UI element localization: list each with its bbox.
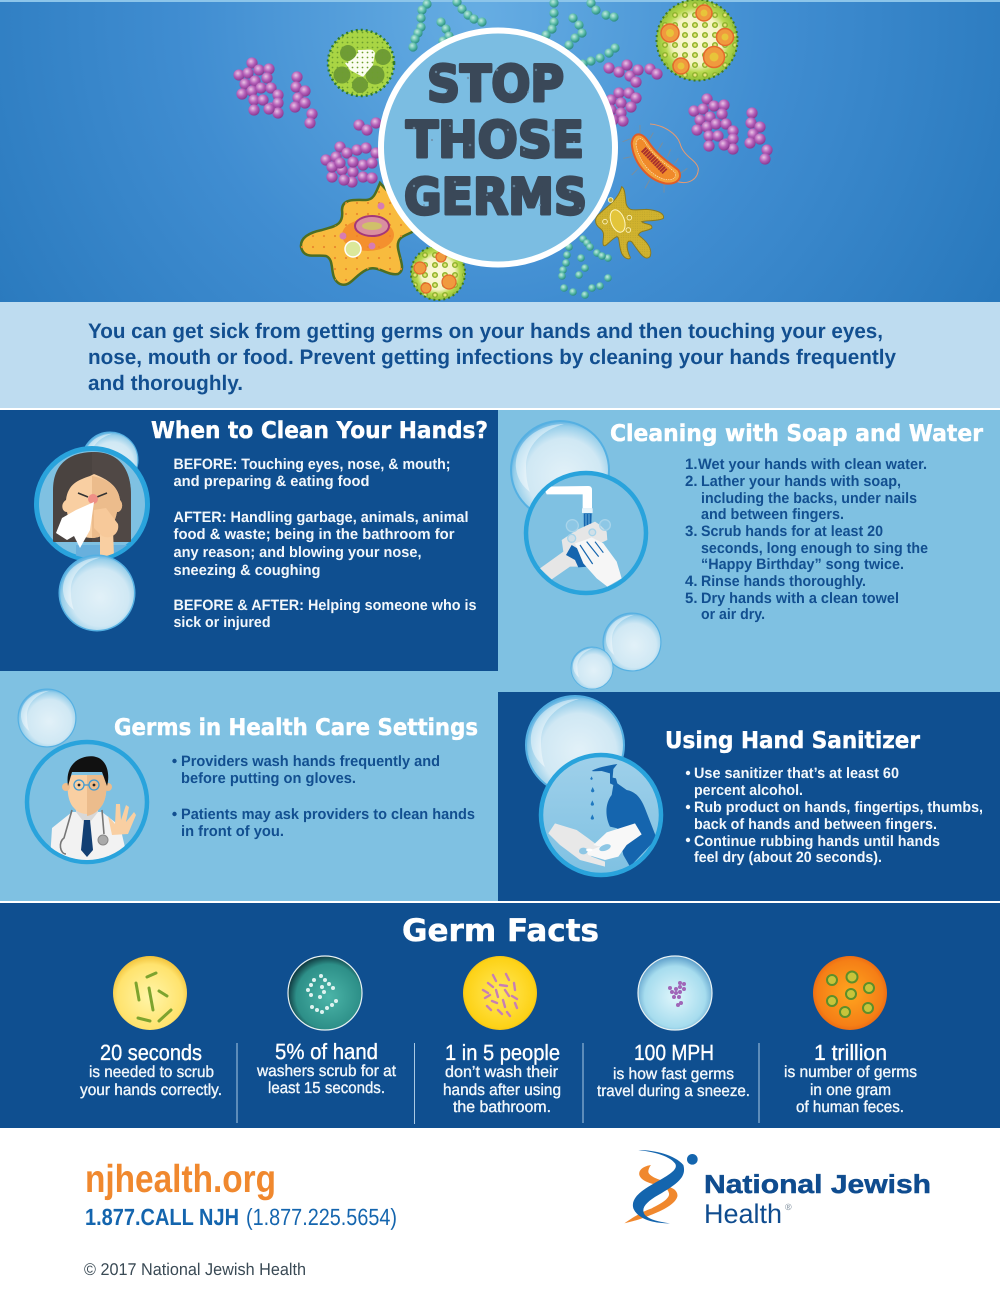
text: when to clean: sick or injured [174,614,270,631]
fact: 5% of hand [256,956,397,1097]
logo: National Jewish Health [624,1150,931,1229]
text: soap steps: 5. [685,590,698,607]
fact: 100 MPH: is how fast germs [613,1066,734,1083]
icon: bubble [18,689,76,747]
germ: orange bacterium [623,124,698,193]
text: when to clean: BEFORE & AFTER: Helping someone who is [174,597,476,614]
text: soap steps [685,456,928,623]
fact: 20 seconds: 20 seconds [100,1040,202,1065]
title: THOSE [406,111,584,169]
intro text: You can get sick from getting germs on your hands and then touching your eyes, [88,320,883,343]
text: provider bullets: Patients may ask providers to clean hands [181,806,475,823]
icon: washing hands [526,473,646,593]
heading: Using Hand Sanitizer [665,728,921,754]
intro text [88,320,896,395]
footer contact [84,1158,397,1279]
fact: 20 seconds: your hands correctly. [80,1082,222,1099]
text: sanitizer bullets [686,765,983,866]
text: when to clean: food & waste; being in the bathroom for [174,526,455,543]
panel: using hand sanitizer [498,692,1000,901]
intro text: and thoroughly. [88,372,243,395]
logo text [704,1169,931,1229]
text: sanitizer bullets: Use sanitizer that’s at least 60 [694,765,899,782]
text: soap steps: or air dry. [701,606,765,623]
text: sanitizer bullets: back of hands and between fingers. [694,816,937,833]
intro band [0,302,1000,408]
panel: germs in health care settings [0,671,498,901]
fact: 1 in 5 people [443,956,561,1116]
germ: teal bead chains top [408,0,620,69]
heading: Germs in Health Care Settings [114,715,478,741]
text: provider bullets: before putting on gloves. [181,770,356,787]
text: when to clean: any reason; and blowing your nose, [174,544,422,561]
text: soap steps: 1. [685,456,698,473]
germ: green virus upper right [656,0,738,80]
text: soap steps: 4. [685,573,698,590]
fact: 1 in 5 people: 1 in 5 people [445,1040,560,1065]
fact: 20 seconds [80,956,222,1099]
icon: bubble [526,696,624,794]
text: provider bullets [172,753,475,840]
germ: green virus bottom [411,246,465,300]
text: soap steps: and between fingers. [701,506,844,523]
website: njhealth.org [85,1158,276,1201]
fact: 1 trillion [784,956,917,1116]
icon: bubble [603,613,661,671]
text: soap steps: Lather your hands with soap, [701,473,901,490]
panel: germ facts [0,903,1000,1128]
title [404,55,587,226]
phone number: (1.877.225.5654) [246,1204,397,1230]
logo text: Health [704,1199,782,1229]
germ: olive amoeba [596,187,664,259]
text: soap steps: Wet your hands with clean water. [698,456,927,473]
title: STOP [427,55,564,113]
fact: 20 seconds: is needed to scrub [89,1064,214,1081]
germ: green virus upper left [328,30,394,96]
text: soap steps: including the backs, under nails [701,490,917,507]
fact: 1 trillion: of human feces. [796,1099,904,1116]
logo text: ® [785,1202,792,1212]
fact: 1 trillion: 1 trillion [814,1040,887,1065]
germ: teal bead chains bottom [558,235,612,299]
fact: 100 MPH: travel during a sneeze. [597,1083,750,1100]
text: soap steps: Rinse hands thoroughly. [701,573,866,590]
text: sanitizer bullets: Continue rubbing hands until hands [694,833,940,850]
text: sanitizer bullets: percent alcohol. [694,782,803,799]
panel: when to clean your hands [0,410,498,671]
icon: doctor [27,742,147,862]
germ: yellow amoeba [301,183,418,285]
copyright: © 2017 National Jewish Health [84,1260,306,1279]
fact: 5% of hand: 5% of hand [275,1039,378,1064]
text: when to clean [174,456,476,631]
germ: purple cluster behind circle right [603,59,663,127]
text: provider bullets: in front of you. [181,823,284,840]
fact: 1 trillion: in one gram [810,1082,891,1099]
panel: cleaning with soap and water [498,410,1000,692]
text: sanitizer bullets: Rub product on hands, fingertips, thumbs, [694,799,983,816]
fact: 1 trillion: is number of germs [784,1064,917,1081]
icon: bubble [82,432,138,488]
text: sanitizer bullets: feel dry (about 20 seconds). [694,849,882,866]
heading: Germ Facts [402,913,599,949]
fact: 1 in 5 people: don’t wash their [445,1064,559,1081]
text: soap steps: 3. [685,523,698,540]
text: soap steps: 2. [685,473,698,490]
icon: bubble [59,555,135,631]
text: soap steps: Dry hands with a clean towel [701,590,899,607]
text: soap steps: “Happy Birthday” song twice. [701,556,904,573]
fact: 1 in 5 people: the bathroom. [453,1099,551,1116]
icon: sanitizer bottle and hands [541,755,661,875]
fact: 100 MPH: 100 MPH [634,1040,714,1065]
text: provider bullets: Providers wash hands frequently and [181,753,440,770]
text: when to clean: and preparing & eating food [174,473,370,490]
text: when to clean: sneezing & coughing [174,562,320,579]
phone: 1.877.CALL NJH [85,1204,239,1230]
germ: purple cluster left [233,57,318,129]
icon: bubble [511,421,609,519]
hero banner [0,0,1000,302]
fact: 100 MPH [597,956,750,1100]
heading: Cleaning with Soap and Water [610,421,984,447]
fact: 5% of hand: least 15 seconds. [268,1080,385,1097]
title: GERMS [404,168,587,226]
text: soap steps: Scrub hands for at least 20 [701,523,883,540]
germ: purple cluster behind circle left [320,117,382,188]
fact: 1 in 5 people: hands after using [443,1082,561,1099]
text: when to clean: BEFORE: Touching eyes, nose, & mouth; [174,456,450,473]
icon: bubble [571,647,613,689]
icon: sneezing woman [36,448,148,570]
icon: helix [624,1150,698,1223]
text: soap steps: seconds, long enough to sing the [701,540,928,557]
fact: 5% of hand: washers scrub for at [256,1063,397,1080]
logo text: National Jewish [704,1169,931,1199]
germ: purple cluster right [688,93,773,165]
intro text: nose, mouth or food. Prevent getting infections by cleaning your hands frequently [88,346,896,369]
heading: When to Clean Your Hands? [151,418,488,444]
text: when to clean: AFTER: Handling garbage, animals, animal [174,509,468,526]
title circle [381,30,615,264]
